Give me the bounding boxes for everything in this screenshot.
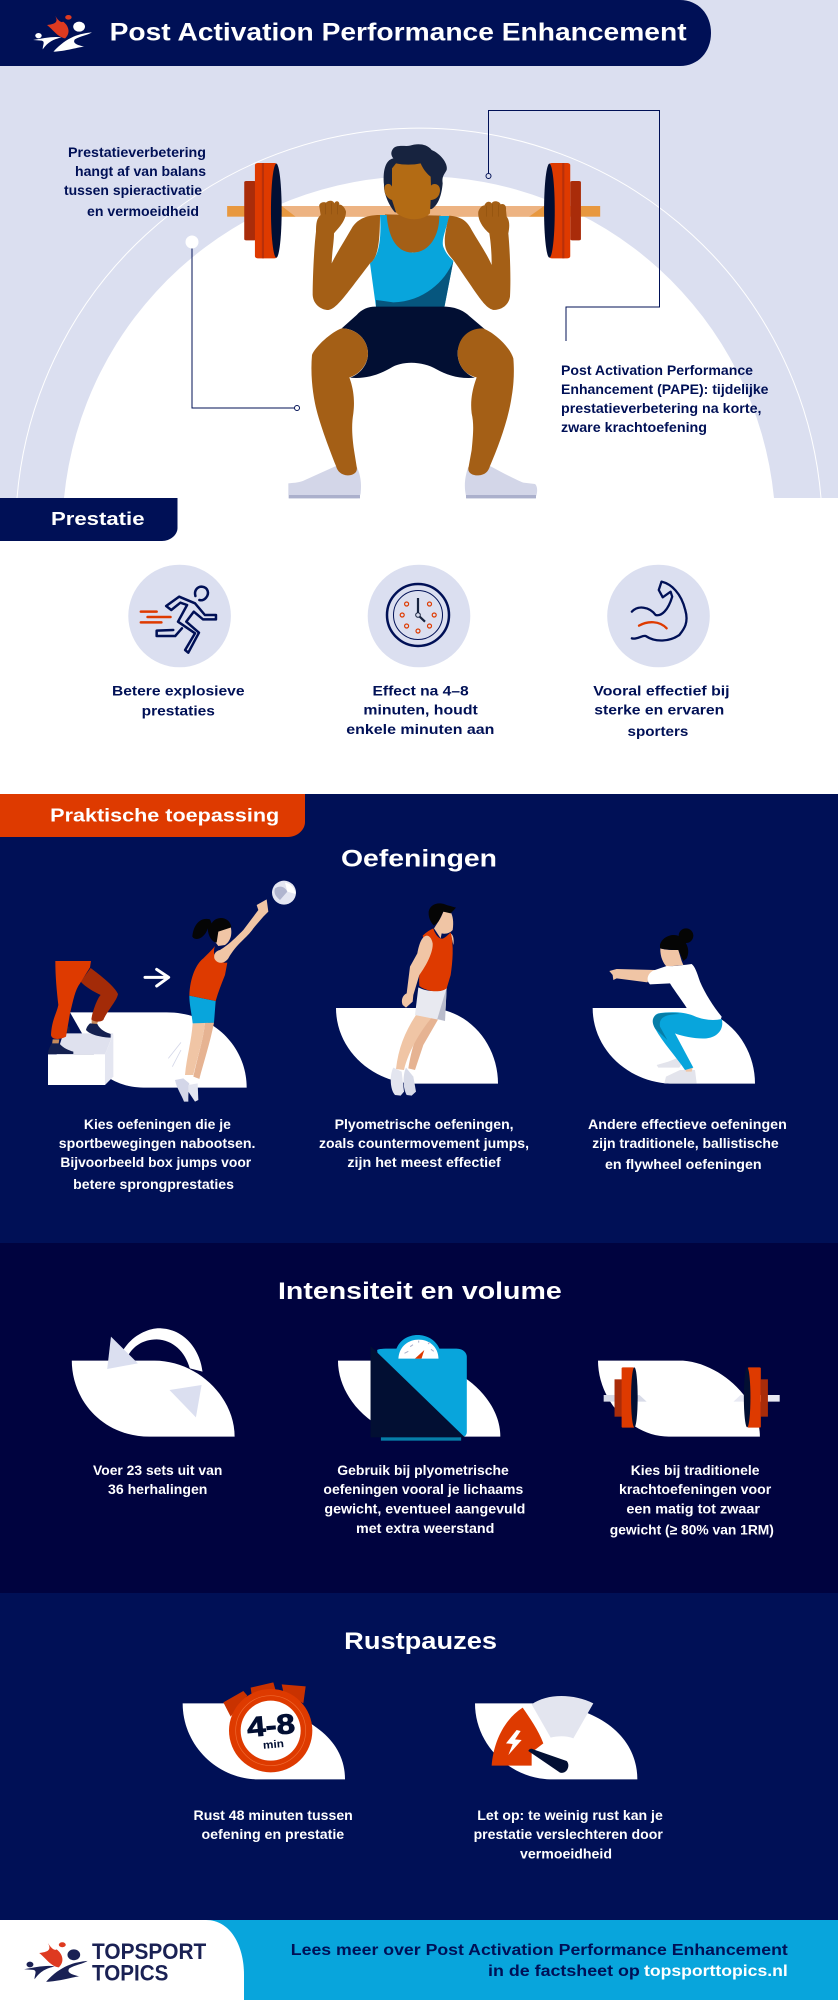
right arm	[445, 201, 510, 310]
text: andere oefeningen: en flywheel oefeningen	[605, 1156, 762, 1172]
callout line right	[486, 110, 660, 341]
callout dot left	[186, 236, 198, 248]
text: rust	[194, 1807, 353, 1842]
text: plyometrisch	[319, 1116, 529, 1170]
left arm	[313, 201, 380, 310]
text: box jumps: betere sprongprestaties	[73, 1176, 234, 1192]
tab: praktische toepassing: Praktische toepassing	[50, 804, 279, 825]
footer	[0, 1920, 838, 2000]
text: rust: oefening en prestatie	[202, 1826, 344, 1842]
text: box jumps	[59, 1116, 255, 1192]
panel: intensiteit en volume	[0, 1243, 838, 1593]
text: traditionele kracht: Kies bij traditionele	[631, 1462, 760, 1478]
tank top shadow	[376, 261, 453, 307]
left shoe	[288, 466, 361, 498]
text: box jumps: Kies oefeningen die je	[84, 1116, 231, 1132]
icon: clock	[368, 565, 470, 667]
callout text right: zware krachtoefening	[561, 419, 707, 435]
text: effect na 4-8: minuten, houdt	[363, 702, 478, 718]
icon: stopwatch: min	[263, 1738, 285, 1752]
icon: muscle	[607, 565, 710, 667]
text: betere prestaties: Betere explosieve	[112, 683, 245, 699]
shorts	[342, 307, 485, 378]
icon: weight scale	[338, 1335, 500, 1441]
text: sterke sporters	[593, 683, 730, 739]
text: effect na 4-8	[346, 683, 494, 737]
tank top	[370, 215, 453, 307]
logo wordmark	[92, 1939, 207, 1986]
text: lichaamsgewicht: gewicht, eventueel aangevuld	[324, 1501, 525, 1517]
panel: rustpauzes	[0, 1593, 838, 1920]
tab: prestatie	[0, 498, 178, 541]
text: traditionele kracht: krachtoefeningen voor	[619, 1481, 772, 1497]
fingers	[325, 203, 499, 217]
text: box jumps: Bijvoorbeeld box jumps voor	[60, 1154, 252, 1170]
title: Post Activation Performance Enhancement	[110, 19, 687, 47]
text: sets: 36 herhalingen	[108, 1481, 207, 1497]
text: lichaamsgewicht: Gebruik bij plyometrische	[337, 1462, 509, 1478]
text: let op: prestatie verslechteren door	[474, 1826, 663, 1842]
logo wordmark: TOPSPORT	[92, 1939, 207, 1964]
shoe soles	[289, 495, 536, 498]
tab: praktische toepassing	[0, 794, 305, 837]
tab: prestatie: Prestatie	[51, 508, 144, 529]
athlete upper body	[313, 144, 510, 310]
panel: hero	[0, 0, 838, 498]
icon: stopwatch	[183, 1682, 345, 1779]
icon: runner	[128, 565, 231, 667]
illustration: countermovement jump	[336, 903, 498, 1096]
arrow	[145, 969, 169, 986]
callout text right	[561, 362, 769, 435]
text: sets: Voer 23 sets uit van	[93, 1462, 222, 1478]
icon: fatigue gauge	[475, 1696, 637, 1779]
icon: dumbbell	[598, 1361, 780, 1437]
header bar	[0, 0, 711, 66]
text: effect na 4-8: enkele minuten aan	[346, 721, 494, 737]
callout text right: Enhancement (PAPE): tijdelijke	[561, 381, 769, 397]
panel: oefeningen	[0, 794, 838, 1243]
text: plyometrisch: zoals countermovement jumps,	[319, 1135, 529, 1151]
text: lichaamsgewicht: oefeningen vooral je lichaams	[323, 1481, 524, 1497]
illustration: box jump	[48, 881, 296, 1102]
text: betere prestaties	[112, 683, 245, 719]
footer call to action	[291, 1942, 788, 1980]
illustration: squat	[593, 928, 755, 1084]
text: let op: Let op: te weinig rust kan je	[477, 1807, 663, 1823]
logo footer	[24, 1942, 88, 1982]
text: box jumps: sportbewegingen nabootsen.	[59, 1135, 255, 1151]
logo header	[33, 15, 92, 52]
hero white dome	[64, 176, 774, 498]
text: lichaamsgewicht: met extra weerstand	[356, 1520, 494, 1536]
right leg	[458, 328, 514, 475]
panel: prestatie	[0, 498, 730, 739]
callout text right: prestatieverbetering na korte,	[561, 400, 762, 416]
face	[384, 163, 440, 219]
right shoe	[465, 466, 537, 498]
heading: oefeningen: Oefeningen	[341, 846, 497, 873]
logo wordmark: TOPICS	[92, 1961, 168, 1986]
hero outer arc	[17, 128, 821, 498]
barbell	[227, 163, 600, 258]
callout text right: Post Activation Performance	[561, 362, 753, 378]
text: andere oefeningen: zijn traditionele, ballistische	[592, 1135, 779, 1151]
callout text left: en vermoeidheid	[87, 203, 199, 219]
text: rust: Rust 48 minuten tussen	[194, 1807, 353, 1823]
text: sets	[93, 1462, 222, 1497]
text: plyometrisch: Plyometrische oefeningen,	[335, 1116, 514, 1132]
icon: stopwatch: 4-8	[246, 1708, 296, 1743]
text: lichaamsgewicht	[323, 1462, 525, 1536]
callout text left: Prestatieverbetering	[68, 144, 206, 160]
chest	[385, 214, 441, 253]
text: andere oefeningen	[588, 1116, 787, 1172]
text: sterke sporters: sporters	[628, 723, 689, 739]
text: traditionele kracht	[610, 1462, 774, 1537]
volleyball	[272, 881, 296, 905]
heading: intensiteit en volume: Intensiteit en volume	[278, 1278, 562, 1305]
left leg	[311, 328, 368, 475]
heading: rustpauzes: Rustpauzes	[344, 1628, 497, 1655]
text: traditionele kracht: gewicht (≥ 80% van 1RM)	[610, 1521, 774, 1537]
callout text left: tussen spieractivatie	[64, 182, 202, 198]
icon: sets loop	[72, 1328, 235, 1437]
text: effect na 4-8: Effect na 4–8	[372, 683, 469, 699]
athlete lower body	[288, 307, 537, 498]
footer call to action: Lees meer over Post Activation Performance Enhancement	[291, 1942, 788, 1959]
footer call to action: topsporttopics.nl	[644, 1963, 788, 1980]
text: let op: vermoeidheid	[520, 1846, 612, 1862]
text: sterke sporters: sterke en ervaren	[594, 702, 724, 718]
text: betere prestaties: prestaties	[142, 703, 215, 719]
hair	[384, 144, 447, 212]
callout text left: hangt af van balans	[75, 163, 206, 179]
footer call to action: in de factsheet op	[488, 1963, 640, 1980]
text: sterke sporters: Vooral effectief bij	[593, 683, 730, 699]
text: traditionele kracht: een matig tot zwaar	[626, 1500, 761, 1516]
callout text left	[64, 144, 206, 219]
text: let op	[474, 1807, 663, 1862]
text: plyometrisch: zijn het meest effectief	[347, 1154, 501, 1170]
callout line left	[192, 248, 300, 410]
text: andere oefeningen: Andere effectieve oefeningen	[588, 1116, 787, 1132]
